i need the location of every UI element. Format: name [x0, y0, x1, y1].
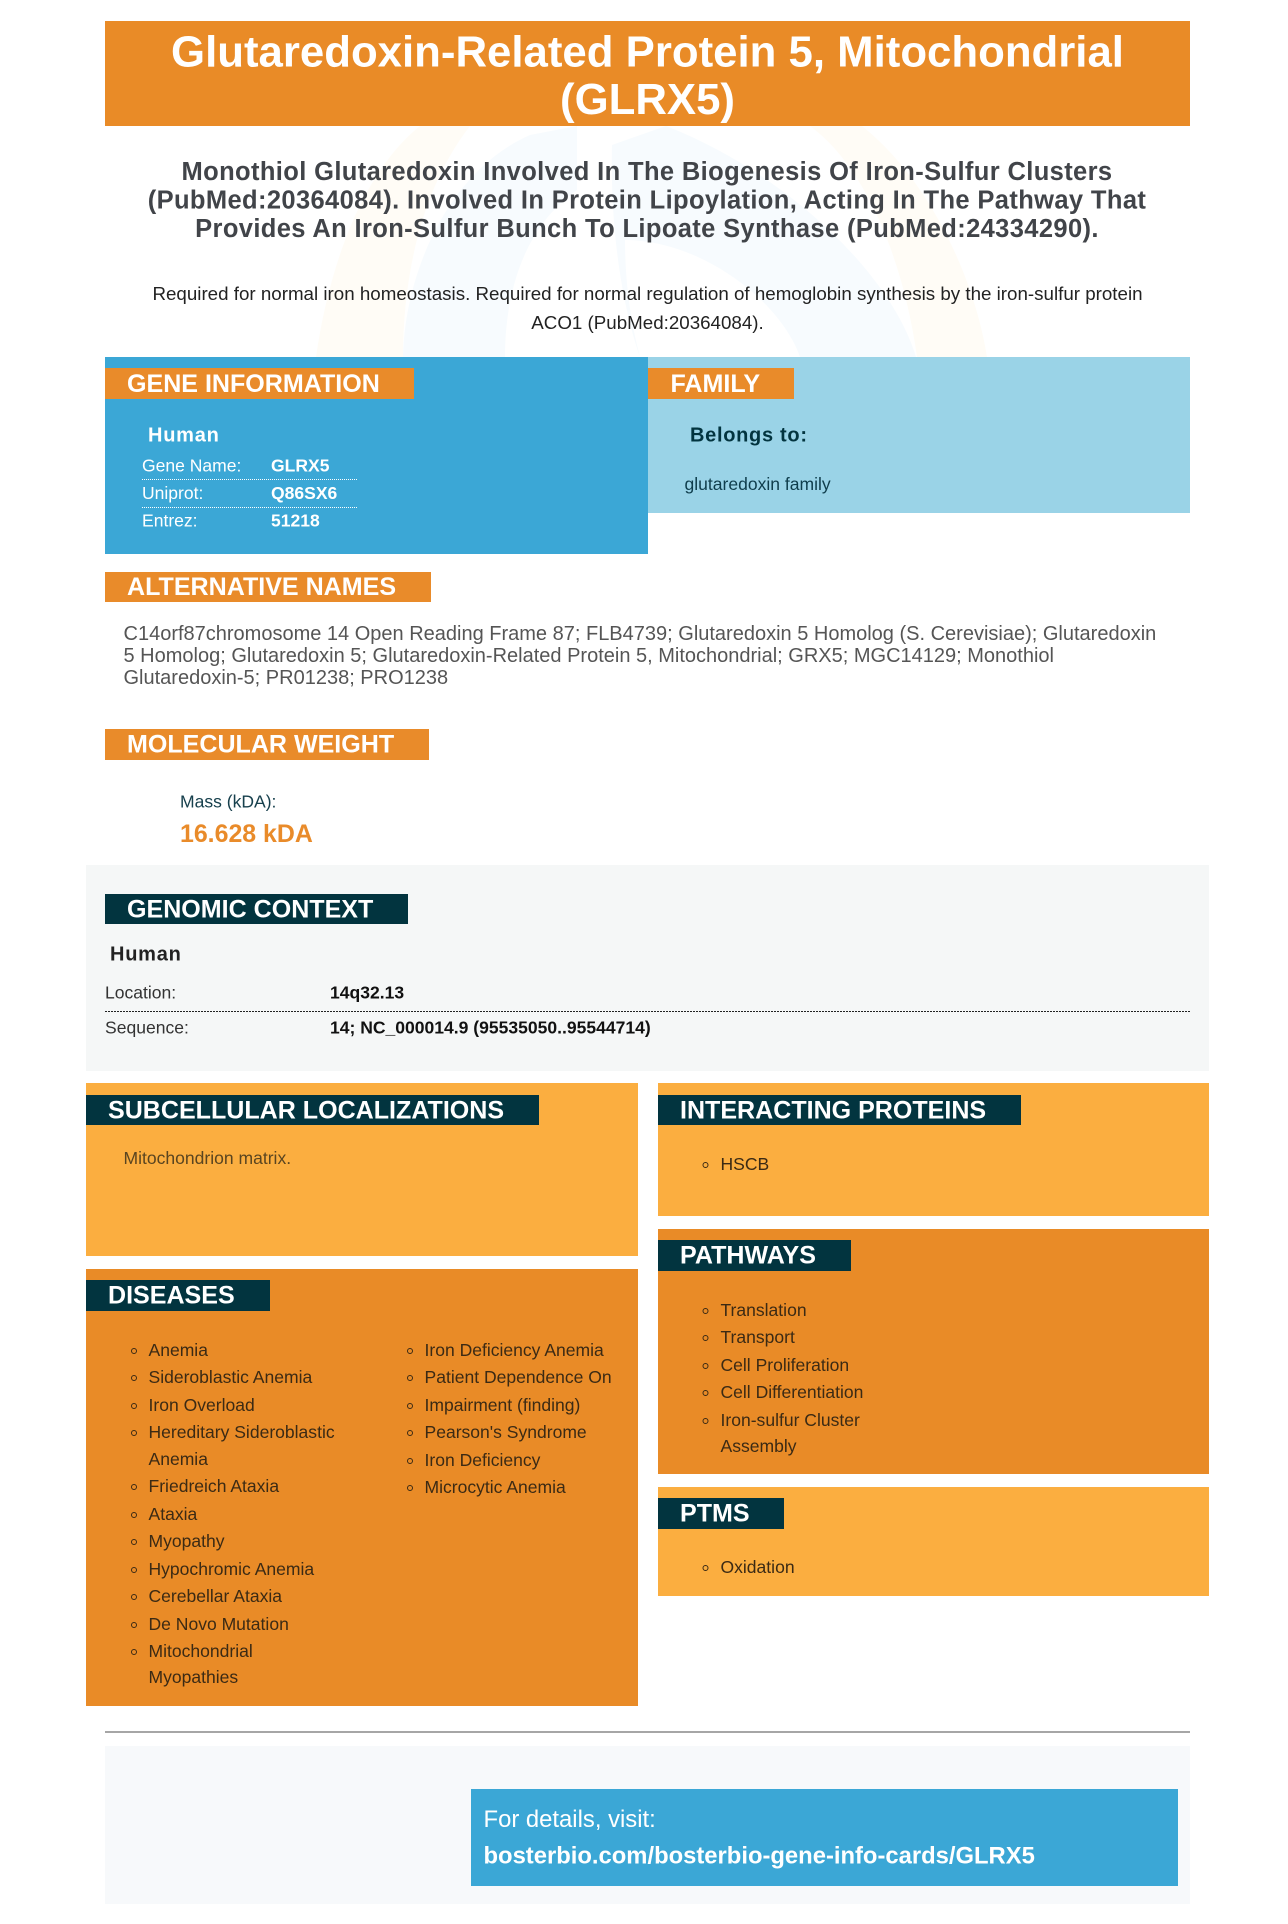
alternative names text [124, 623, 1156, 689]
gene info table: Gene Name: [142, 456, 241, 476]
title banner: (GLRX5) [560, 75, 735, 124]
heading: subcellular localizations: SUBCELLULAR LOCALIZATIONS [108, 1096, 504, 1124]
list: pathways: Translation [720, 1300, 807, 1320]
heading: pathways: PATHWAYS [680, 1242, 816, 1270]
localization text: Mitochondrion matrix. [124, 1148, 291, 1168]
belongs to label: Belongs to: [690, 424, 808, 446]
list: diseases column 2: Patient Dependence On [424, 1367, 612, 1387]
list: diseases column 2 [408, 1340, 612, 1497]
heading: family [648, 368, 794, 399]
subtitle: protein function: Provides An Iron-Sulfur Bunch To Lipoate Synthase (PubMed:24334290). [195, 215, 1099, 243]
list: diseases column 2: Iron Deficiency [424, 1450, 541, 1470]
section: molecular weight [105, 729, 429, 848]
alternative names text: C14orf87chromosome 14 Open Reading Frame 87; FLB4739; Glutaredoxin 5 Homolog (S. Cerevisiae); Glutaredoxin [124, 623, 1156, 645]
sequence row [105, 1018, 651, 1038]
list: pathways: Cell Proliferation [720, 1355, 849, 1375]
family name: glutaredoxin family [684, 474, 831, 494]
list: diseases column 2: Impairment (finding) [424, 1395, 580, 1415]
list: PTMs: Oxidation [720, 1557, 795, 1577]
location row: Location: [105, 982, 176, 1002]
location row: 14q32.13 [330, 982, 404, 1002]
list: diseases column 2: Iron Deficiency Anemia [424, 1340, 604, 1360]
gene info table: Q86SX6 [271, 483, 338, 503]
list: pathways: Iron-sulfur Cluster [720, 1410, 860, 1430]
list: diseases column 1: Ataxia [148, 1504, 197, 1524]
panel: PTMs [658, 1487, 1209, 1596]
mass value: 16.628 kDA [180, 820, 313, 848]
list: diseases column 1: Myopathies [148, 1667, 238, 1687]
description text: ACO1 (PubMed:20364084). [531, 312, 764, 333]
heading: genomic context: GENOMIC CONTEXT [127, 896, 374, 924]
list: diseases column 2: Pearson's Syndrome [424, 1422, 587, 1442]
footer panel [105, 1746, 1190, 1904]
heading: diseases: DISEASES [108, 1282, 235, 1310]
panel: pathways [658, 1229, 1209, 1474]
list: interacting proteins: HSCB [720, 1154, 769, 1174]
heading: gene information: GENE INFORMATION [127, 370, 380, 398]
gene info table: 51218 [271, 510, 320, 530]
sequence row: 14; NC_000014.9 (95535050..95544714) [330, 1018, 651, 1038]
section: alternative names [105, 572, 1156, 689]
list: diseases column 1: Sideroblastic Anemia [148, 1367, 312, 1387]
heading: molecular weight: MOLECULAR WEIGHT [127, 730, 395, 758]
panel: gene information [105, 357, 648, 554]
list: pathways: Assembly [720, 1436, 797, 1456]
callout: details link: For details, visit: [484, 1806, 656, 1833]
list: diseases column 1 [132, 1340, 335, 1687]
panel: interacting proteins [658, 1083, 1209, 1216]
list: diseases column 1: Hypochromic Anemia [148, 1559, 314, 1579]
list: diseases column 1: Myopathy [148, 1531, 225, 1551]
location row [105, 982, 404, 1002]
list: diseases column 1: De Novo Mutation [148, 1614, 289, 1634]
list: pathways [703, 1300, 863, 1456]
subtitle: protein function [148, 158, 1146, 243]
list: diseases column 1: Anemia [148, 1449, 208, 1469]
heading: PTMs: PTMS [680, 1500, 750, 1528]
heading: pathways [658, 1240, 851, 1271]
species label: Human [110, 944, 182, 966]
alternative names text: Glutaredoxin-5; PR01238; PRO1238 [124, 667, 448, 689]
panel: family [648, 357, 1190, 513]
list: diseases column 1: Mitochondrial [148, 1641, 253, 1661]
description text [152, 283, 1143, 333]
subtitle: protein function: Monothiol Glutaredoxin Involved In The Biogenesis Of Iron-Sulfur Clusters [182, 158, 1112, 186]
species label: Human [148, 424, 220, 446]
gene info table [142, 456, 357, 530]
heading: PTMs [658, 1498, 784, 1529]
list: diseases column 1: Anemia [148, 1340, 208, 1360]
heading: diseases [86, 1280, 270, 1311]
mass label: Mass (kDA): [180, 792, 276, 812]
panel: subcellular localizations [86, 1083, 638, 1256]
list: diseases column 2: Microcytic Anemia [424, 1477, 566, 1497]
list: pathways: Transport [720, 1327, 795, 1347]
subtitle: protein function: (PubMed:20364084). Involved In Protein Lipoylation, Acting In The Pathway That [148, 186, 1146, 214]
alternative names text: 5 Homolog; Glutaredoxin 5; Glutaredoxin-Related Protein 5, Mitochondrial; GRX5; MGC14129; Monothiol [124, 645, 1054, 667]
gene info table: GLRX5 [271, 456, 330, 476]
heading: family: FAMILY [670, 370, 760, 398]
panel: genomic context [86, 865, 1209, 1071]
sequence row: Sequence: [105, 1018, 189, 1038]
list: diseases column 1: Hereditary Sideroblastic [148, 1422, 335, 1442]
heading: alternative names: ALTERNATIVE NAMES [127, 573, 396, 601]
callout: details link [471, 1789, 1178, 1886]
panel: diseases [86, 1269, 638, 1706]
gene info table: Entrez: [142, 510, 198, 530]
list: diseases column 1: Cerebellar Ataxia [148, 1586, 282, 1606]
gene info table: Uniprot: [142, 483, 203, 503]
list: diseases column 1: Friedreich Ataxia [148, 1476, 279, 1496]
description text: Required for normal iron homeostasis. Required for normal regulation of hemoglobin synthesis by the iron-sulfur protein [152, 283, 1143, 304]
title banner [105, 21, 1190, 126]
list: pathways: Cell Differentiation [720, 1382, 863, 1402]
heading: interacting proteins: INTERACTING PROTEINS [680, 1096, 986, 1124]
title banner: Glutaredoxin-Related Protein 5, Mitochondrial [171, 28, 1124, 76]
callout: details link: bosterbio.com/bosterbio-gene-info-cards/GLRX5 [484, 1842, 1035, 1870]
background watermark logo [316, 126, 987, 357]
list: diseases column 1: Iron Overload [148, 1395, 255, 1415]
